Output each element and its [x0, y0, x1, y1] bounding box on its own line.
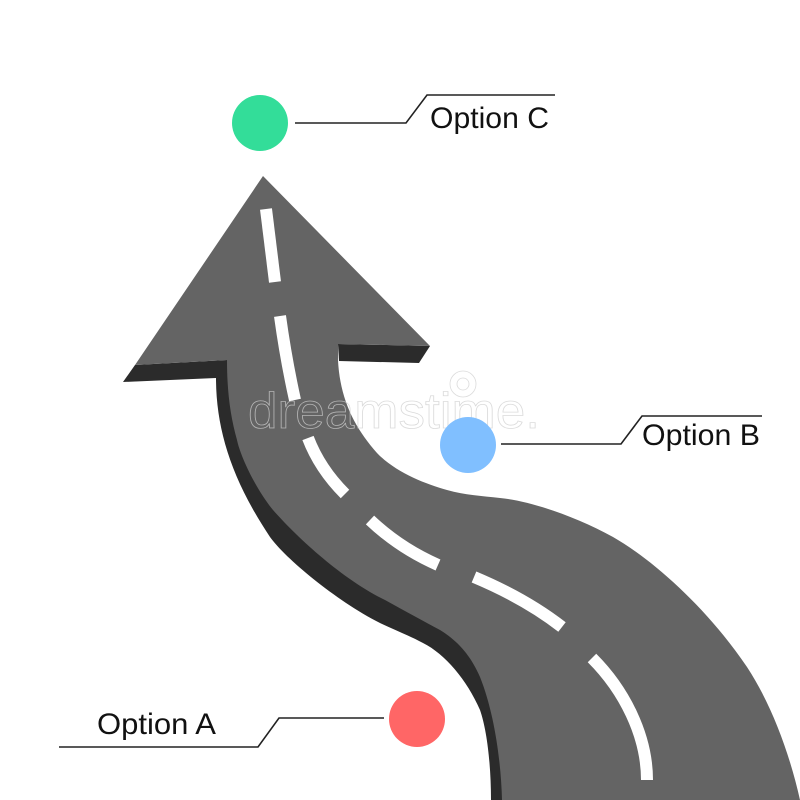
dash 6	[592, 658, 647, 780]
dash 1	[266, 209, 275, 282]
road side shadow: right wing	[338, 344, 430, 363]
road arrow	[123, 176, 800, 800]
road side shadow: left edge	[123, 360, 510, 800]
option A marker	[389, 691, 445, 747]
option B leader line	[501, 416, 762, 444]
watermark	[248, 371, 540, 439]
dash 2	[280, 316, 295, 400]
option A label: Option A	[97, 708, 216, 741]
road top surface and arrow head	[135, 176, 800, 800]
option A leader line	[59, 718, 384, 747]
option B label: Option B	[642, 419, 760, 452]
option C marker	[232, 95, 288, 151]
dash 3	[308, 438, 345, 494]
option C leader line	[295, 95, 555, 123]
dash 5	[474, 577, 562, 627]
centre line dashes	[266, 209, 647, 780]
option B marker	[440, 417, 496, 473]
dash 4	[370, 520, 438, 565]
option C label: Option C	[430, 102, 549, 135]
watermark logo	[450, 371, 476, 397]
watermark text: dreamstime.	[248, 383, 540, 439]
